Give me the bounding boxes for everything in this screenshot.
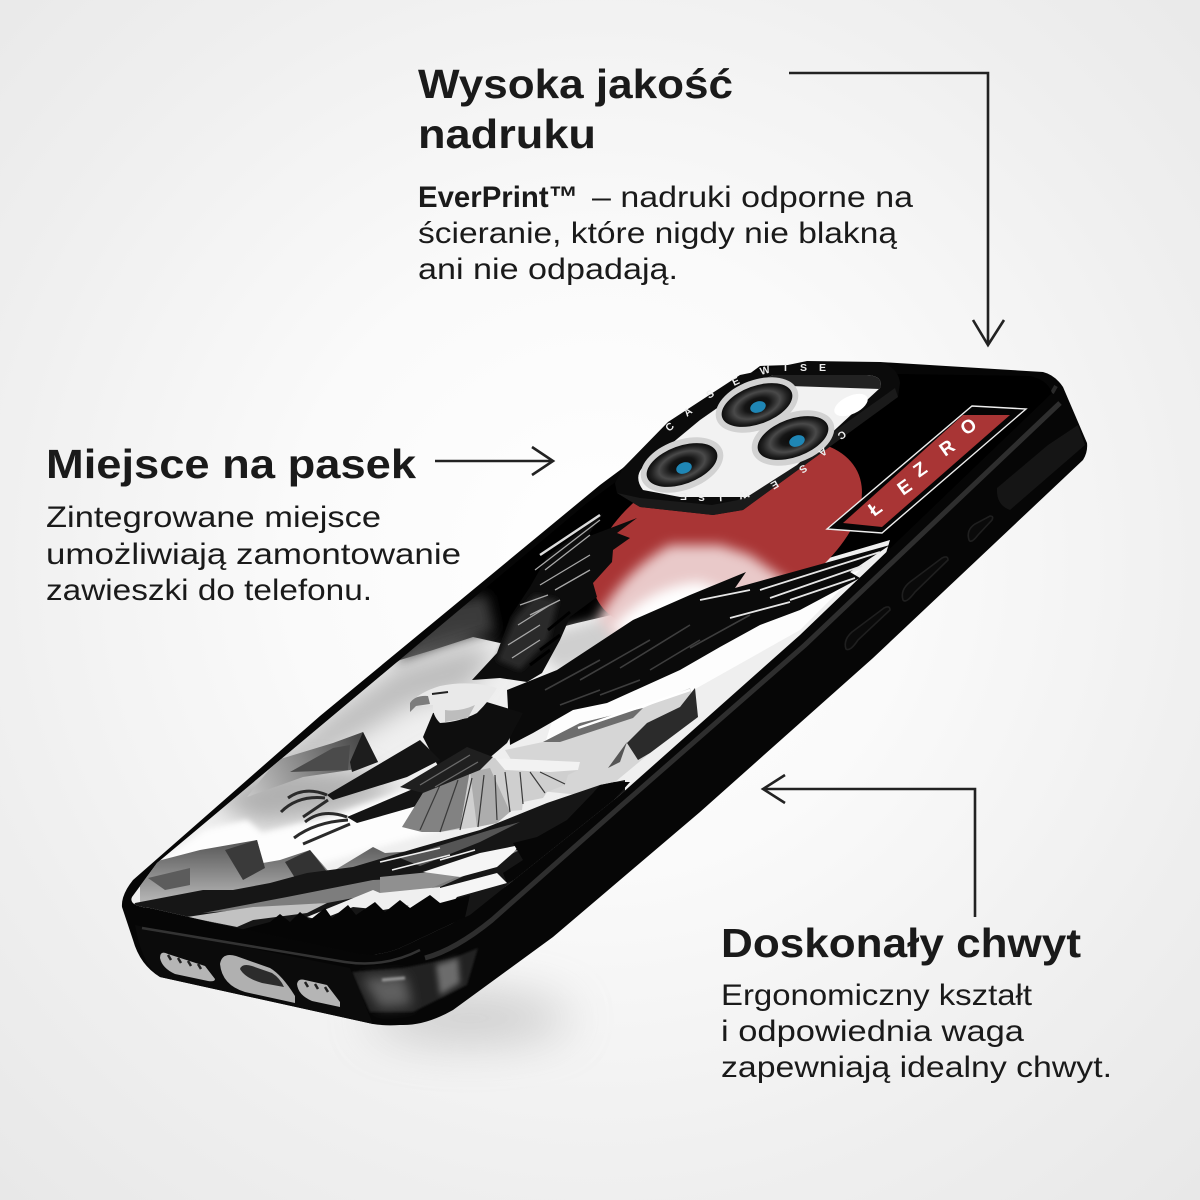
tree line bbox=[244, 895, 470, 954]
red label: Ł bbox=[865, 497, 887, 521]
camera module bbox=[615, 361, 900, 515]
lens 1 bbox=[708, 367, 806, 443]
brand ring text: A bbox=[681, 405, 695, 419]
text block: print quality: ani nie odpadają. bbox=[418, 253, 678, 286]
brand ring text: A bbox=[816, 445, 829, 459]
side buttons bbox=[845, 425, 1085, 650]
red label: Z bbox=[910, 458, 932, 482]
heading: print quality bbox=[418, 61, 733, 157]
text block: print quality: – nadruki odporne na bbox=[592, 181, 913, 214]
black crag bbox=[503, 782, 630, 883]
red label: R bbox=[936, 436, 959, 461]
text block: strap slot: umożliwiają zamontowanie bbox=[46, 538, 461, 571]
text block: grip: Ergonomiczny kształt bbox=[721, 979, 1033, 1012]
camera plate bbox=[638, 375, 881, 497]
text block: print quality bbox=[418, 181, 913, 286]
heading: print quality: Wysoka jakość bbox=[418, 61, 733, 107]
upper right mountain bbox=[505, 688, 698, 795]
foreground ridge bbox=[134, 780, 625, 954]
heading: strap slot: Miejsce na pasek bbox=[46, 441, 416, 487]
text block: grip bbox=[721, 979, 1112, 1084]
red label bbox=[827, 406, 1026, 533]
text block: strap slot: zawieszki do telefonu. bbox=[46, 574, 372, 607]
grey layers bbox=[203, 850, 520, 913]
glossy bottom corner bbox=[352, 948, 478, 1012]
mid mountains bbox=[140, 840, 405, 908]
arrow: grip bbox=[763, 775, 975, 917]
brand ring text: C bbox=[835, 428, 848, 442]
brand ring text: I bbox=[719, 491, 722, 503]
lens 2 bbox=[744, 400, 842, 476]
heading: grip: Doskonały chwyt bbox=[721, 920, 1081, 966]
heading: print quality: nadruku bbox=[418, 111, 596, 157]
red label: E bbox=[894, 476, 916, 500]
eagle tail feathers bbox=[400, 747, 580, 832]
red label: O bbox=[957, 414, 981, 440]
arrow: strap slot bbox=[435, 447, 553, 475]
bottom ports bbox=[160, 953, 340, 1007]
case body bbox=[122, 362, 1087, 1025]
bottom lip bbox=[135, 925, 373, 1024]
eagle body bbox=[423, 702, 510, 765]
shadow under phone bbox=[370, 996, 570, 1040]
brand ring text bbox=[663, 362, 848, 503]
arrow: print quality bbox=[789, 73, 1004, 345]
phone case bbox=[100, 340, 1100, 1025]
brand ring text: S bbox=[800, 362, 807, 374]
sky bbox=[100, 540, 890, 960]
side edge bands bbox=[425, 403, 1060, 958]
printed back bbox=[131, 391, 1052, 954]
eagle legs and talons bbox=[280, 740, 436, 846]
text block: strap slot: Zintegrowane miejsce bbox=[46, 501, 381, 534]
brand ring text: W bbox=[738, 487, 750, 501]
white fade over sun bbox=[598, 545, 800, 645]
left mountain bbox=[247, 732, 378, 797]
eagle left wing bbox=[472, 513, 637, 682]
brand ring text: S bbox=[797, 462, 809, 475]
brand ring text: E bbox=[819, 362, 826, 374]
text block: grip: zapewniają idealny chwyt. bbox=[721, 1051, 1112, 1084]
lens 3 bbox=[633, 427, 731, 503]
brand ring text: S bbox=[698, 491, 705, 503]
brand ring text: E bbox=[730, 375, 742, 389]
text block: print quality: ścieranie, które nigdy nie blakną bbox=[418, 217, 897, 250]
white snow streaks bbox=[423, 845, 520, 877]
brand ring text: E bbox=[680, 490, 687, 502]
brand ring text: E bbox=[768, 477, 780, 491]
text block: grip: i odpowiednia waga bbox=[721, 1015, 1024, 1048]
text block: print quality: EverPrint™ bbox=[418, 181, 578, 214]
side pad bbox=[997, 425, 1085, 510]
brand ring text: S bbox=[704, 388, 717, 402]
brand ring text: C bbox=[663, 420, 677, 434]
eagle head bbox=[410, 684, 487, 723]
text block: strap slot bbox=[46, 501, 461, 607]
eagle right wing bbox=[507, 545, 890, 745]
red sun bbox=[593, 446, 862, 616]
brand ring text: W bbox=[759, 364, 771, 378]
brand ring text: I bbox=[784, 362, 787, 374]
